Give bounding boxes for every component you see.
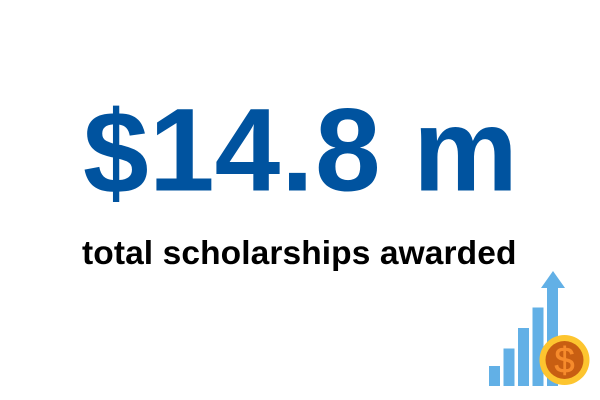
arrow xyxy=(541,271,565,386)
icon: rising bar chart with coin xyxy=(489,271,590,386)
bar 4 xyxy=(532,308,544,386)
icon: dollar coin: $ xyxy=(554,340,575,380)
headline figure: 14 xyxy=(149,84,280,216)
headline figure: m xyxy=(413,84,518,216)
headline figure: . xyxy=(281,84,314,216)
bar 1 xyxy=(489,366,500,386)
subtitle: total scholarships awarded xyxy=(82,235,517,272)
bar 2 xyxy=(504,348,514,386)
headline figure: $ xyxy=(83,87,149,219)
headline figure: 8 xyxy=(315,84,381,216)
bar 3 xyxy=(518,328,529,386)
